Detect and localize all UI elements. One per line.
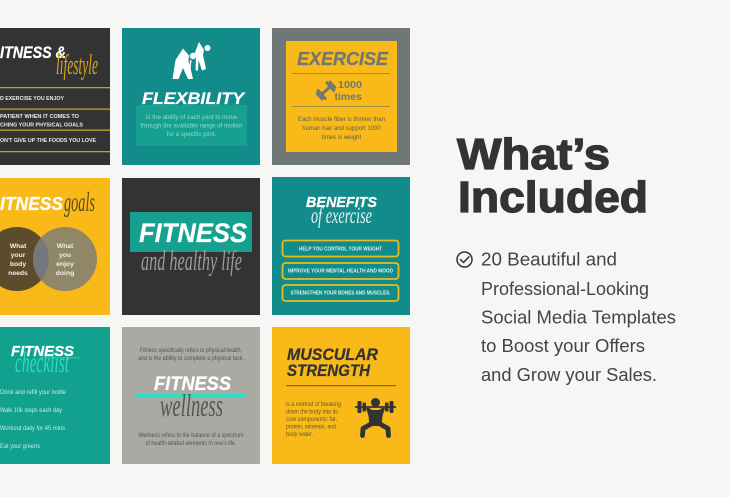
venn diagram: doing xyxy=(56,270,74,277)
checklist items: Eat your greens xyxy=(0,443,41,450)
heading: fitness and: ITNESS & xyxy=(0,44,66,62)
list rows: PATIENT WHEN IT COMES TO xyxy=(0,114,79,120)
text panel: definition: for a specific joint. xyxy=(167,131,217,138)
heading: fitness: FITNESS xyxy=(154,374,231,395)
text panel: definition: through the available range of motion xyxy=(140,122,243,130)
checklist items: Workout daily for 45 mins xyxy=(0,425,66,432)
body text: human hair and support 1000 xyxy=(302,126,381,132)
text block: included description: to Boost your Offers xyxy=(481,336,645,356)
body text: times is weight xyxy=(322,135,361,141)
body text: body water. xyxy=(286,431,313,438)
heading: fitness: FITNESS xyxy=(139,218,247,248)
script: and healthy life: and healthy life xyxy=(141,245,242,277)
panel: exercise card xyxy=(272,28,410,165)
venn diagram: What xyxy=(57,243,74,250)
body text: core components: fat, xyxy=(286,416,337,423)
panel: muscular strength card xyxy=(272,327,410,464)
panel: fitness goals card xyxy=(0,178,110,315)
panel: fitness wellness card xyxy=(122,327,260,464)
benefit button 2: IMPROVE YOUR MENTAL HEALTH AND MOOD xyxy=(288,268,393,274)
venn diagram: body xyxy=(10,261,26,268)
stat: 1000 times: 1000 xyxy=(338,79,362,91)
list rows xyxy=(0,87,110,152)
script: of exercise: of exercise xyxy=(311,203,372,228)
script: goals: goals xyxy=(64,187,95,217)
body text: Each muscle fiber is thinner than xyxy=(298,117,385,123)
venn diagram: enjoy xyxy=(56,261,74,268)
script: wellness: wellness xyxy=(160,387,223,423)
benefit button 1: HELP YOU CONTROL YOUR WEIGHT xyxy=(299,246,382,252)
panel: fitness and healthy life card xyxy=(122,178,260,315)
heading: what's included xyxy=(457,130,648,222)
body text: down the body into its xyxy=(286,408,338,416)
heading: muscular strength: MUSCULAR xyxy=(287,346,378,364)
heading: exercise: EXERCISE xyxy=(297,49,389,69)
list rows: ON'T GIVE UP THE FOODS YOU LOVE xyxy=(0,138,96,144)
body text xyxy=(298,117,385,141)
script: checklist: checklist xyxy=(15,346,69,379)
text panel: definition: Is the ability of each joint to move xyxy=(146,114,238,121)
bottom text: of health-related elements in one's life. xyxy=(146,441,237,447)
text block: included description: Professional-Looking xyxy=(481,279,649,299)
heading: what's included: Included xyxy=(458,173,648,222)
panel: flexibility card xyxy=(122,28,260,165)
icon: check circle xyxy=(457,252,472,267)
benefit button 3: STRENGTHEN YOUR BONES AND MUSCLES. xyxy=(290,290,391,296)
venn diagram: your xyxy=(11,252,26,259)
banner xyxy=(130,212,252,252)
bottom text xyxy=(138,433,244,447)
checklist items: Walk 10k steps each day xyxy=(0,407,63,414)
body text xyxy=(286,401,341,438)
icon: dumbbell xyxy=(314,79,338,102)
heading: benefits: BENEFITS xyxy=(306,194,377,211)
text block: included description: 20 Beautiful and xyxy=(481,250,617,270)
body text: is a method of breaking xyxy=(286,401,341,408)
venn diagram: needs xyxy=(8,270,28,277)
heading: fitness: FITNESS xyxy=(11,343,74,360)
mint band xyxy=(136,394,246,398)
text block: included description xyxy=(481,250,676,385)
stat: 1000 times: times xyxy=(334,91,362,103)
checklist items: Drink and refill your bottle xyxy=(0,389,66,396)
stat: 1000 times xyxy=(334,79,362,103)
panel: fitness and lifestyle card: lifestyle xyxy=(56,49,98,81)
top text: Fitness specifically refers to physical health, xyxy=(140,348,242,354)
bottom text: Wellness refers to the balance of a spectrum xyxy=(138,433,244,439)
checklist items xyxy=(0,389,66,450)
top text xyxy=(138,348,244,362)
heading: what's included: What’s xyxy=(457,130,610,179)
text block: included description: and Grow your Sales. xyxy=(481,365,657,385)
body text: protein, minerals, and xyxy=(286,424,336,431)
top text: and is the ability to complete a physical task. xyxy=(138,356,244,362)
venn diagram: you xyxy=(59,252,71,259)
venn diagram xyxy=(0,227,97,291)
heading: fitness: ITNESS xyxy=(0,194,63,214)
text block: included description: Social Media Templates xyxy=(481,308,676,328)
panel: benefits of exercise card xyxy=(272,177,410,315)
venn diagram: What xyxy=(10,243,27,250)
icon: weightlifter squat xyxy=(355,398,396,436)
list rows: CHING YOUR PHYSICAL GOALS xyxy=(0,122,83,128)
panel: fitness and lifestyle card xyxy=(0,28,110,165)
list rows: D EXERCISE YOU ENJOY xyxy=(0,96,64,102)
text panel: definition xyxy=(136,105,247,146)
panel: fitness checklist card xyxy=(0,327,110,464)
heading: muscular strength xyxy=(287,346,378,380)
icon: two stretching figures xyxy=(172,42,210,79)
heading: muscular strength: STRENGTH xyxy=(287,362,371,380)
heading: flexbility: FLEXBILITY xyxy=(142,89,246,108)
